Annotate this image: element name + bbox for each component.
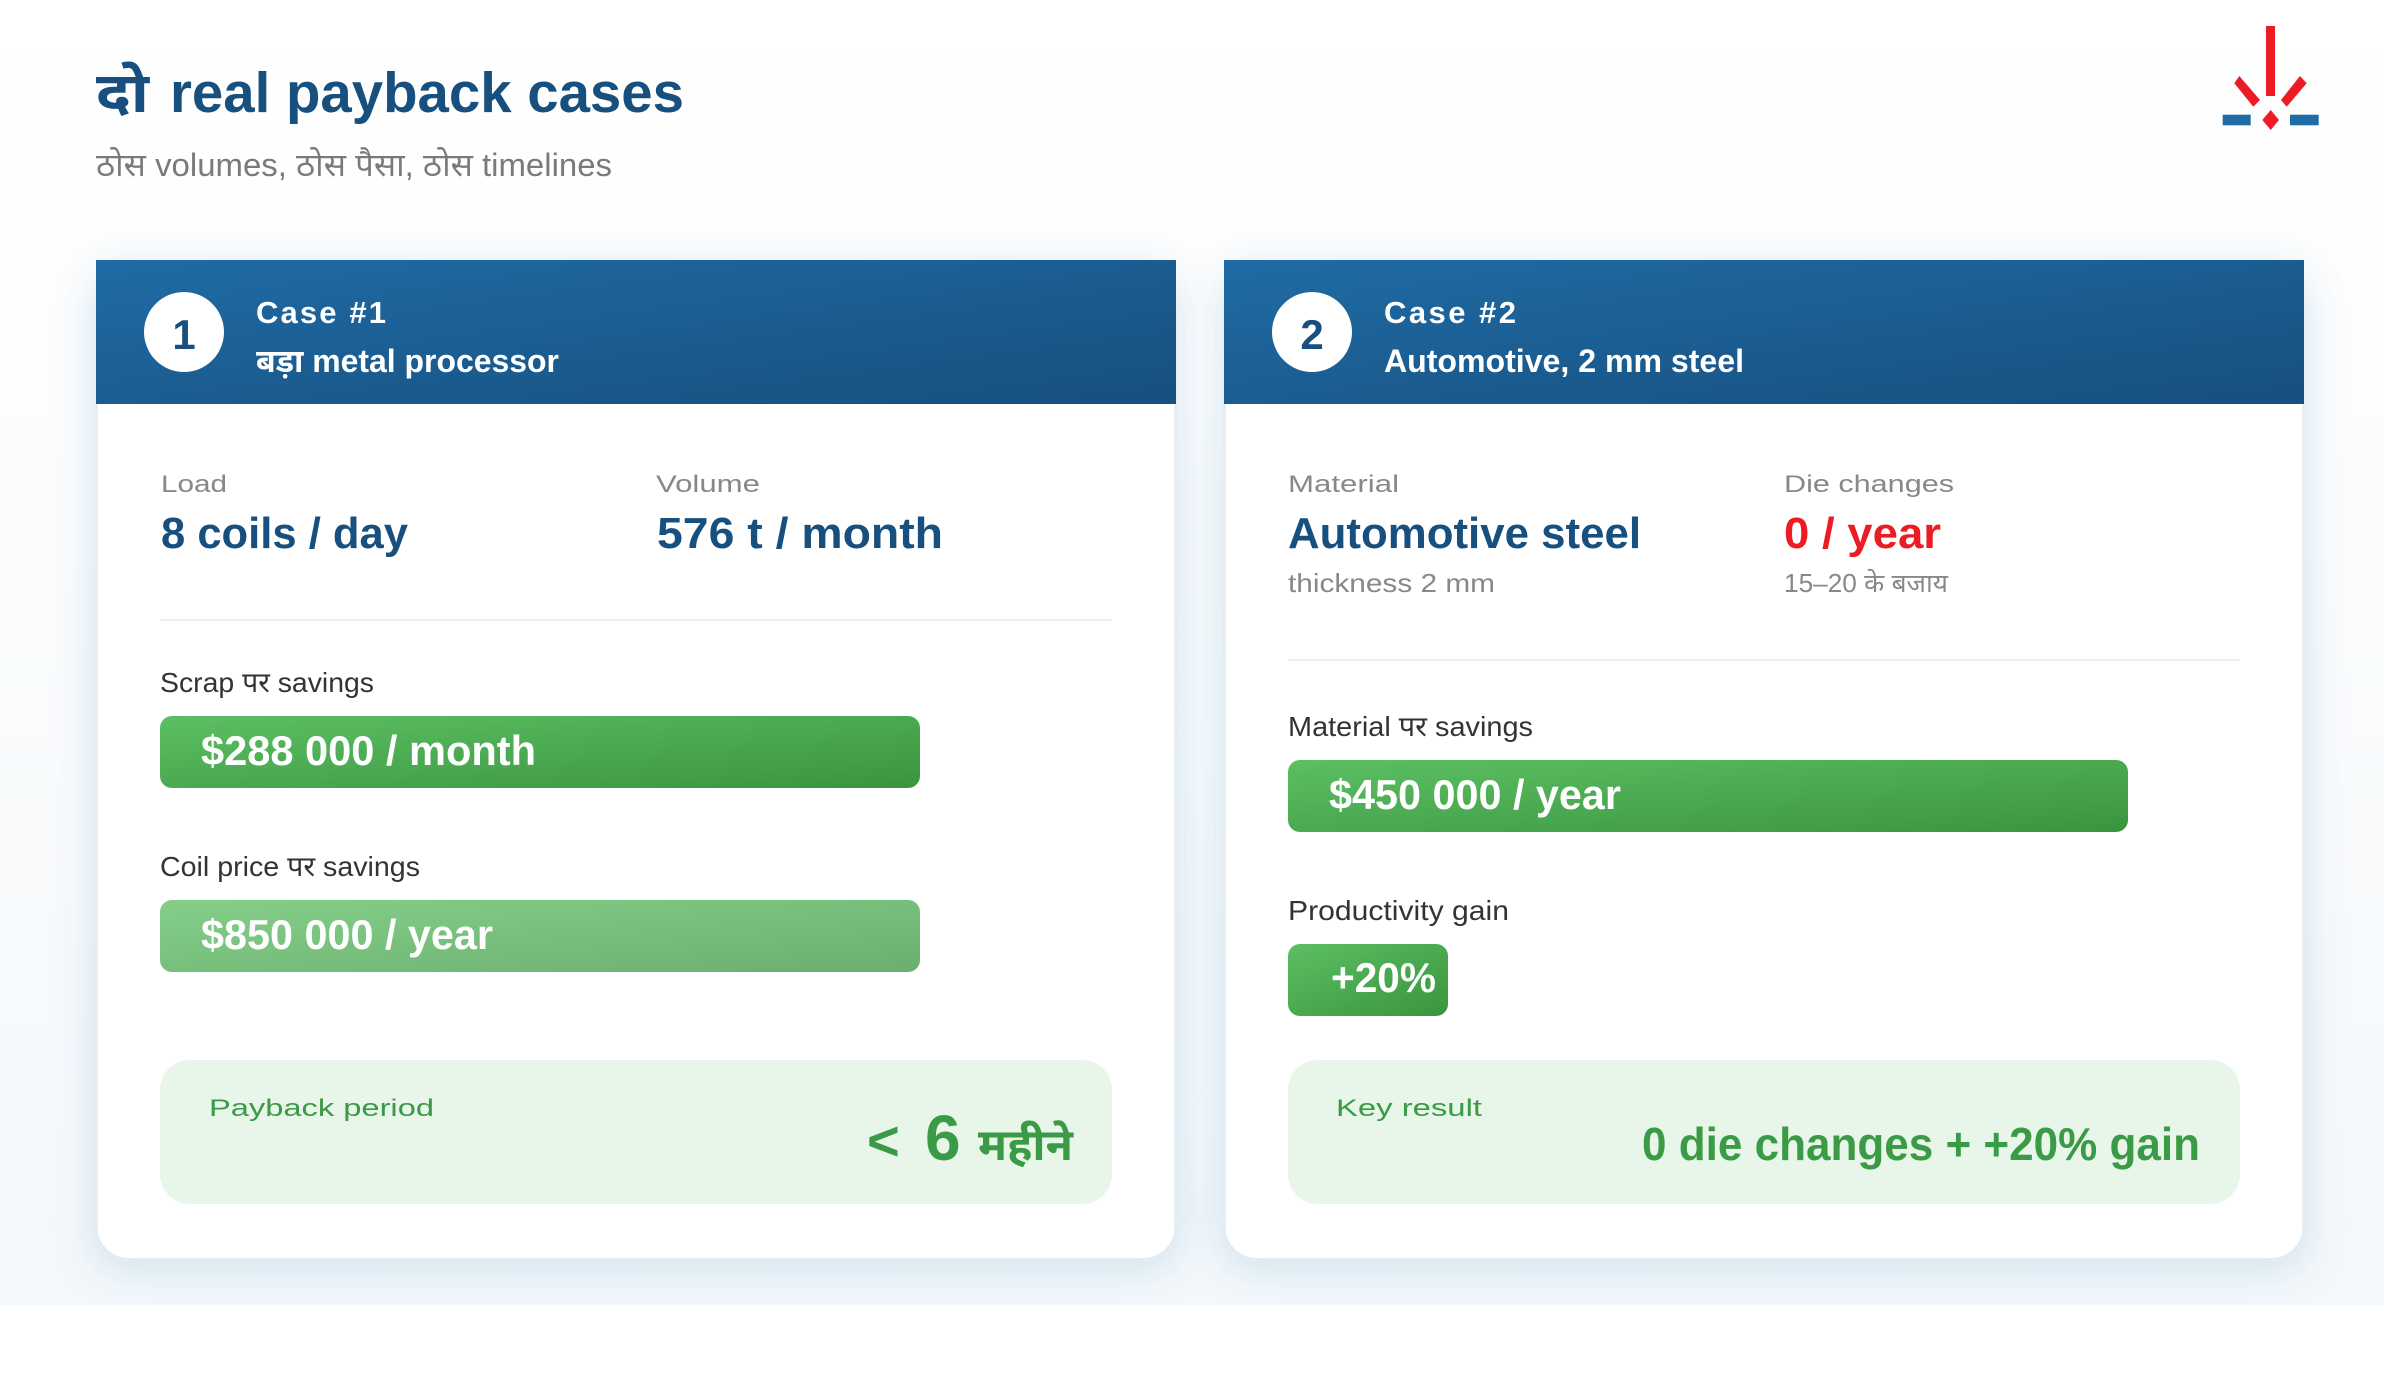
bar: material savings: Material पर savings xyxy=(1288,711,1533,742)
panel: case 2 xyxy=(1224,260,2304,1259)
callout: payback period: Payback period xyxy=(209,1095,434,1122)
bar: productivity gain xyxy=(1288,895,1509,1016)
bar: coil price savings: Coil price पर savings xyxy=(160,851,420,882)
metric: material: thickness 2 mm xyxy=(1288,568,1495,598)
metric: material xyxy=(1288,471,1641,598)
card 1 background xyxy=(96,261,1176,1259)
card 1 header xyxy=(96,260,1176,404)
metric: volume xyxy=(656,471,943,558)
card 1 header: Case #1 xyxy=(256,295,386,330)
title: दो xyxy=(96,61,151,124)
metric: die changes: Die changes xyxy=(1784,471,1954,498)
metric: die changes: 15–20 के बजाय xyxy=(1784,568,1949,598)
callout: key result xyxy=(1288,1060,2240,1204)
card 2 header: Case #2 xyxy=(1384,295,1516,330)
subtitle: ठोस volumes, ठोस पैसा, ठोस timelines xyxy=(96,147,612,183)
callout: payback period xyxy=(160,1060,1112,1204)
title: real payback cases xyxy=(170,61,684,125)
bar: productivity gain: +20% xyxy=(1331,954,1436,1001)
card 2 background xyxy=(1224,261,2304,1259)
callout: key result: 0 die changes + +20% gain xyxy=(1642,1118,2200,1170)
bar: coil price savings xyxy=(160,851,920,972)
metric: die changes xyxy=(1784,471,1954,598)
bar: coil price savings: $850 000 / year xyxy=(201,911,493,958)
bar: material savings: $450 000 / year xyxy=(1329,771,1621,818)
bar: scrap savings xyxy=(160,667,920,788)
metric: material: Automotive steel xyxy=(1288,509,1641,558)
callout: key result: Key result xyxy=(1336,1095,1482,1122)
card 2 header xyxy=(1224,260,2304,404)
metric: load: Load xyxy=(161,471,227,498)
bar: material savings xyxy=(1288,711,2128,832)
panel: case 1 xyxy=(96,260,1176,1259)
metric: volume: Volume xyxy=(656,471,760,498)
callout: payback period: < xyxy=(867,1109,900,1172)
metric: material: Material xyxy=(1288,471,1399,498)
bar: scrap savings: Scrap पर savings xyxy=(160,667,374,698)
card 2 header: Automotive, 2 mm steel xyxy=(1384,343,1744,379)
bar: productivity gain: Productivity gain xyxy=(1288,895,1509,926)
icon: laser logo xyxy=(2223,26,2319,130)
card 2 header: 2 xyxy=(1300,311,1324,358)
bar: scrap savings: $288 000 / month xyxy=(201,727,536,774)
card 1 header: 1 xyxy=(172,311,196,358)
metric: load xyxy=(161,471,409,558)
callout: payback period: महीने xyxy=(978,1119,1074,1170)
metric: load: 8 coils / day xyxy=(161,509,409,558)
callout: payback period: 6 xyxy=(925,1102,961,1174)
metric: volume: 576 t / month xyxy=(657,509,943,558)
metric: die changes: 0 / year xyxy=(1784,509,1941,558)
card 1 header: बड़ा metal processor xyxy=(256,343,559,379)
